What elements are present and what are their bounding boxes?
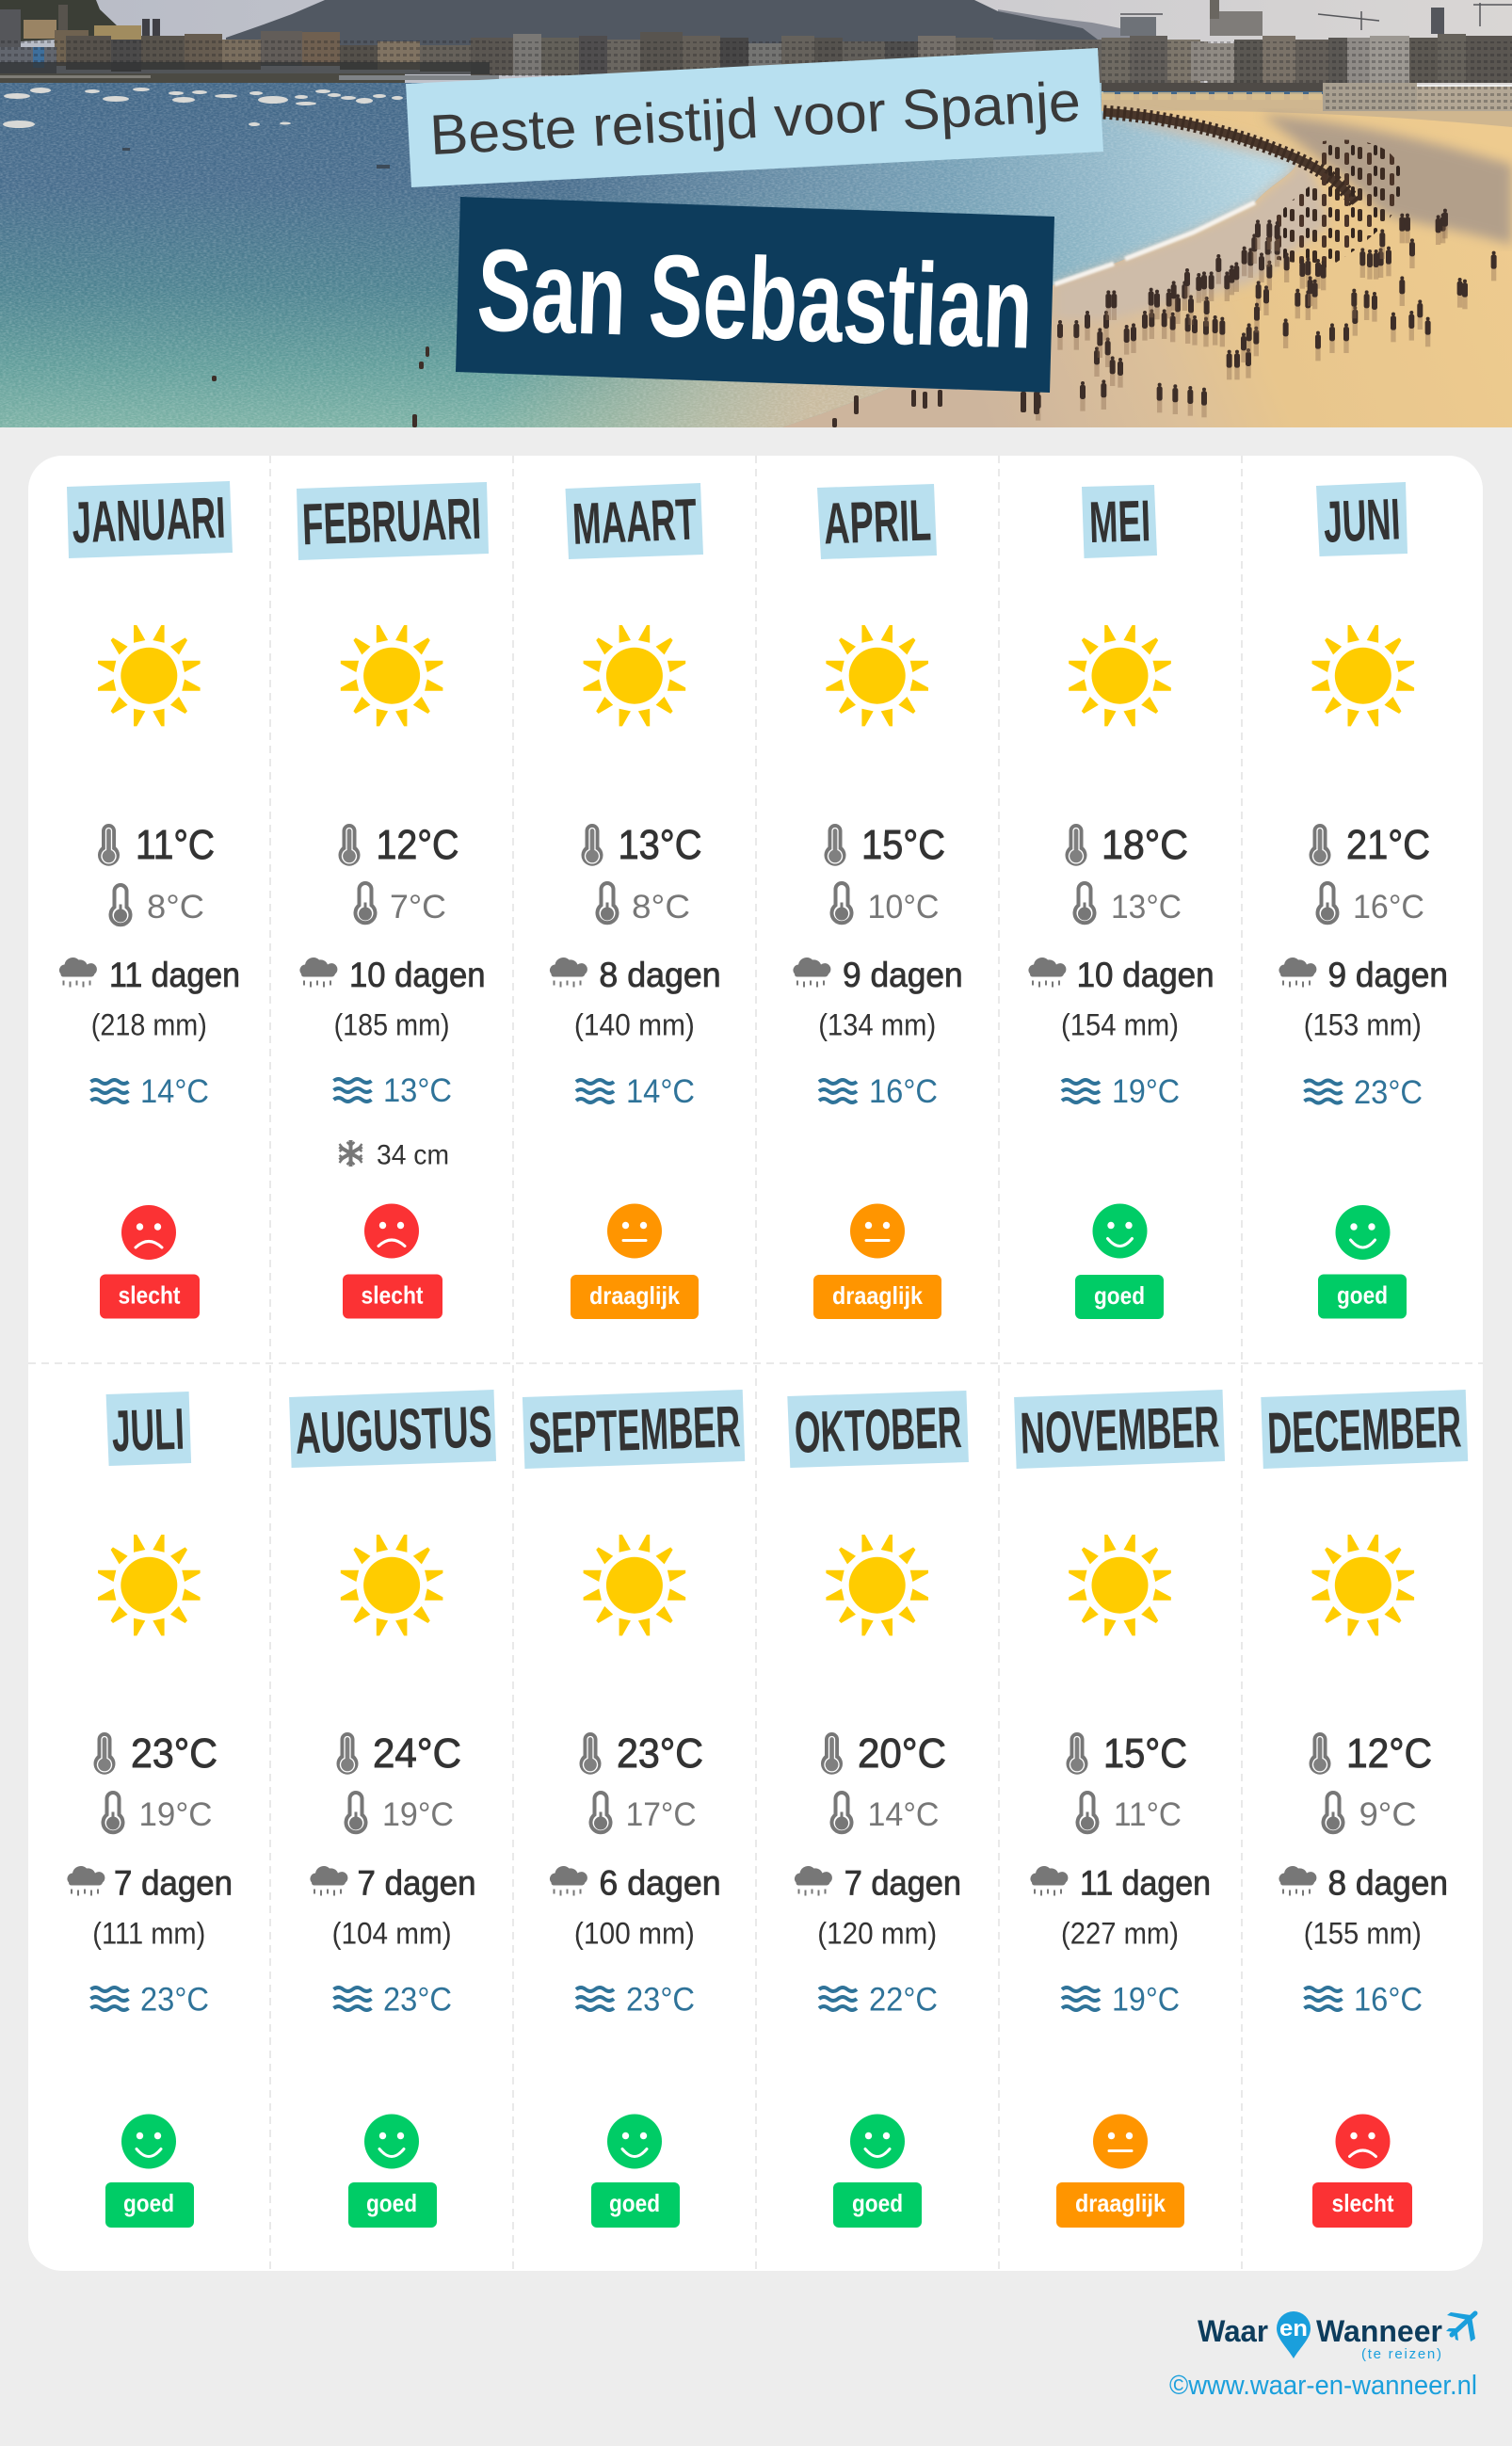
rating: slecht [343,1203,442,1318]
logo: Waar en Wanneer: Wanneer [1316,2314,1442,2348]
website url: ©www.waar-en-wanneer.nl [1169,2371,1477,2401]
max temperature [821,1730,946,1777]
rain days [67,1864,233,1902]
rain days: 7 dagen [844,1864,961,1902]
panel: september [523,1390,745,2228]
min temperature: 17°C [626,1796,697,1833]
max temperature [337,1730,461,1777]
rating: goed: goed [366,2189,417,2217]
heading: juli: JULI [111,1397,185,1464]
rating: goed [1318,1205,1407,1318]
rating: slecht: slecht [362,1280,424,1309]
heading: augustus [289,1390,496,1468]
title text: San Sebastian [475,225,1035,374]
rain days [299,956,486,994]
sea temperature: 23°C [383,1981,452,2019]
sea temperature [333,1072,452,1109]
rain days: 7 dagen [358,1864,476,1902]
min temperature: 8°C [632,889,690,925]
max temperature [1066,1730,1187,1777]
heading: januari: JANUARI [71,486,227,555]
sea temperature: 19°C [1112,1981,1180,2019]
rating: goed: goed [123,2189,174,2217]
rainfall: (120 mm) [817,1917,937,1951]
panel: december [1261,1390,1468,2228]
min temperature [591,1793,697,1833]
sea temperature [819,1981,938,2019]
min temperature [1324,1793,1417,1833]
heading: mei: MEI [1088,489,1151,555]
heading: juli [106,1392,191,1466]
max temperature: 24°C [373,1730,461,1777]
icon: map pin: en [1279,2316,1308,2341]
min temperature: 14°C [868,1796,940,1833]
logo: Waar en Wanneer [1198,2311,1475,2362]
rainfall: (100 mm) [574,1917,695,1951]
sea temperature: 22°C [869,1981,938,2019]
max temperature [1066,822,1188,868]
rating: draaglijk [813,1203,941,1319]
sea temperature [1305,1981,1423,2019]
sea temperature [1062,1981,1180,2019]
heading: april: APRIL [823,489,932,556]
sea temperature [90,1073,209,1110]
rain days: 6 dagen [599,1864,721,1902]
heading: februari [297,482,489,560]
heading: juni: JUNI [1322,487,1402,555]
max temperature [1309,1730,1432,1777]
rain days [59,956,240,994]
heading: september [523,1390,745,1469]
rating: slecht: slecht [119,1280,181,1309]
min temperature: 19°C [382,1796,454,1833]
rating: goed: goed [1337,1280,1388,1309]
rainfall: (218 mm) [91,1007,207,1041]
max temperature: 20°C [858,1730,946,1777]
icon: sun [1069,1535,1171,1635]
min temperature [356,883,446,925]
sea temperature: 14°C [140,1073,209,1110]
min temperature [346,1793,454,1833]
sea temperature: 16°C [869,1073,938,1110]
max temperature: 15°C [861,822,945,868]
subtitle text: Beste reistijd voor Spanje [428,70,1082,167]
panel: november [1014,1390,1225,2228]
snowfall [339,1139,449,1171]
heading: april [817,484,937,559]
min temperature [1075,883,1182,925]
max temperature [582,822,702,868]
heading: september: SEPTEMBER [527,1394,741,1467]
max temperature: 12°C [377,822,459,868]
rain days: 10 dagen [1077,956,1214,994]
heading: maart: MAART [571,487,699,557]
rating: draaglijk [571,1203,699,1319]
icon: airplane [1446,2312,1475,2341]
sea temperature: 23°C [626,1981,695,2019]
sea temperature [576,1073,695,1110]
rain days: 11 dagen [1080,1864,1211,1902]
icon: map pin [1277,2311,1311,2358]
title banner [456,197,1054,393]
rainfall: (104 mm) [332,1917,452,1951]
max temperature [825,822,945,868]
panel: april [793,484,963,1319]
rainfall: (140 mm) [574,1007,695,1041]
heading: november [1014,1390,1225,1469]
sea temperature: 19°C [1112,1073,1180,1110]
min temperature: 16°C [1353,889,1424,925]
rain days [550,1864,721,1902]
rain days [1279,956,1448,994]
min temperature [1318,883,1424,925]
panel: oktober [787,1391,969,2228]
icon: sun [826,625,928,726]
min temperature: 13°C [1111,889,1182,925]
icon: sun [1312,1535,1414,1635]
sea temperature: 16°C [1354,1981,1423,2019]
rain days: 11 dagen [109,956,240,994]
rating: draaglijk [1056,2115,1184,2228]
rain days: 9 dagen [1327,956,1448,994]
rain days [550,956,721,994]
rating: draaglijk: draaglijk [1075,2189,1166,2217]
min temperature [832,883,940,925]
rain days [1030,1864,1211,1902]
rain days [795,1864,961,1902]
icon: sun [826,1535,928,1635]
panel: januari [59,481,240,1318]
panel: februari [297,482,489,1318]
heading: februari: FEBRUARI [301,487,482,557]
heading: oktober [787,1391,969,1468]
min temperature: 7°C [390,889,446,925]
min temperature [597,883,690,925]
min temperature [1077,1793,1182,1833]
rainfall: (153 mm) [1304,1007,1422,1041]
max temperature [1309,822,1430,868]
min temperature: 8°C [147,889,204,925]
min temperature: 9°C [1359,1796,1417,1833]
rating: goed: goed [609,2189,660,2217]
snowfall: 34 cm [377,1139,449,1171]
rating: draaglijk: draaglijk [589,1281,680,1310]
sea temperature [90,1981,209,2019]
rainfall: (111 mm) [92,1917,205,1951]
panel: maart [550,483,721,1319]
heading: mei [1082,485,1157,558]
icon: sun [584,1535,685,1635]
sea temperature [819,1073,938,1110]
rating: slecht [100,1205,200,1318]
rating: draaglijk: draaglijk [832,1281,923,1310]
rainfall: (154 mm) [1061,1007,1179,1041]
max temperature: 15°C [1103,1730,1187,1777]
max temperature: 21°C [1346,822,1430,868]
rain days [1279,1864,1448,1902]
max temperature: 23°C [131,1730,217,1777]
icon: sun [98,1535,201,1635]
rainfall: (185 mm) [334,1007,450,1041]
max temperature: 12°C [1346,1730,1432,1777]
rating: goed [833,2115,922,2228]
rain days: 9 dagen [843,956,963,994]
icon: sun [341,625,442,726]
rain days: 7 dagen [114,1864,233,1902]
min temperature [111,885,204,925]
panel: climate table card [28,456,1483,2271]
logo: Waar en Wanneer: (te reizen) [1361,2346,1441,2362]
heading: november: NOVEMBER [1020,1394,1220,1467]
sea temperature: 13°C [383,1072,452,1109]
rainfall: (227 mm) [1061,1917,1179,1951]
heading: augustus: AUGUSTUS [294,1394,493,1467]
panel: juli [67,1392,233,2228]
rain days [793,956,963,994]
panel: mei [1028,485,1214,1319]
rainfall: (155 mm) [1304,1917,1422,1951]
min temperature: 11°C [1114,1796,1182,1833]
rating: slecht: slecht [1331,2189,1394,2217]
icon: sun [341,1535,442,1635]
icon: sun [584,625,685,726]
heading: oktober: OKTOBER [794,1395,963,1466]
max temperature [94,1730,217,1777]
header photo: San Sebastian bay and beach [0,0,1512,427]
min temperature [104,1793,213,1833]
rating: goed [1075,1203,1164,1319]
rain days: 8 dagen [599,956,721,994]
min temperature: 10°C [868,889,940,925]
panel: augustus [289,1390,496,2228]
max temperature [339,822,459,868]
icon: sun [1312,625,1414,726]
max temperature: 23°C [617,1730,703,1777]
max temperature: 13°C [618,822,702,868]
rating: goed [348,2115,437,2228]
heading: maart [565,483,703,559]
sea temperature [1062,1073,1180,1110]
rating: goed: goed [1094,1281,1145,1310]
sea temperature [576,1981,695,2019]
heading: juni [1316,482,1407,556]
rain days: 10 dagen [349,956,486,994]
max temperature: 18°C [1102,822,1188,868]
max temperature [580,1730,703,1777]
heading: januari [67,481,233,558]
rating: slecht [1312,2115,1412,2228]
subtitle banner [406,48,1103,187]
rating: goed: goed [852,2189,903,2217]
min temperature: 19°C [139,1796,213,1833]
rating: goed [591,2115,680,2228]
max temperature [98,822,215,868]
rain days: 8 dagen [1327,1864,1448,1902]
min temperature [832,1793,940,1833]
sea temperature [333,1981,452,2019]
sea temperature: 23°C [1354,1074,1423,1111]
rain days [310,1864,476,1902]
icon: sun [1069,625,1171,726]
rainfall: (134 mm) [818,1007,936,1041]
sea temperature: 23°C [140,1981,209,2019]
logo: Waar en Wanneer: Waar [1198,2314,1268,2348]
rating: goed [105,2115,194,2228]
max temperature: 11°C [136,822,215,868]
sea temperature [1305,1074,1423,1111]
icon: sun [98,625,201,726]
sea temperature: 14°C [626,1073,695,1110]
panel: juni [1279,482,1448,1318]
